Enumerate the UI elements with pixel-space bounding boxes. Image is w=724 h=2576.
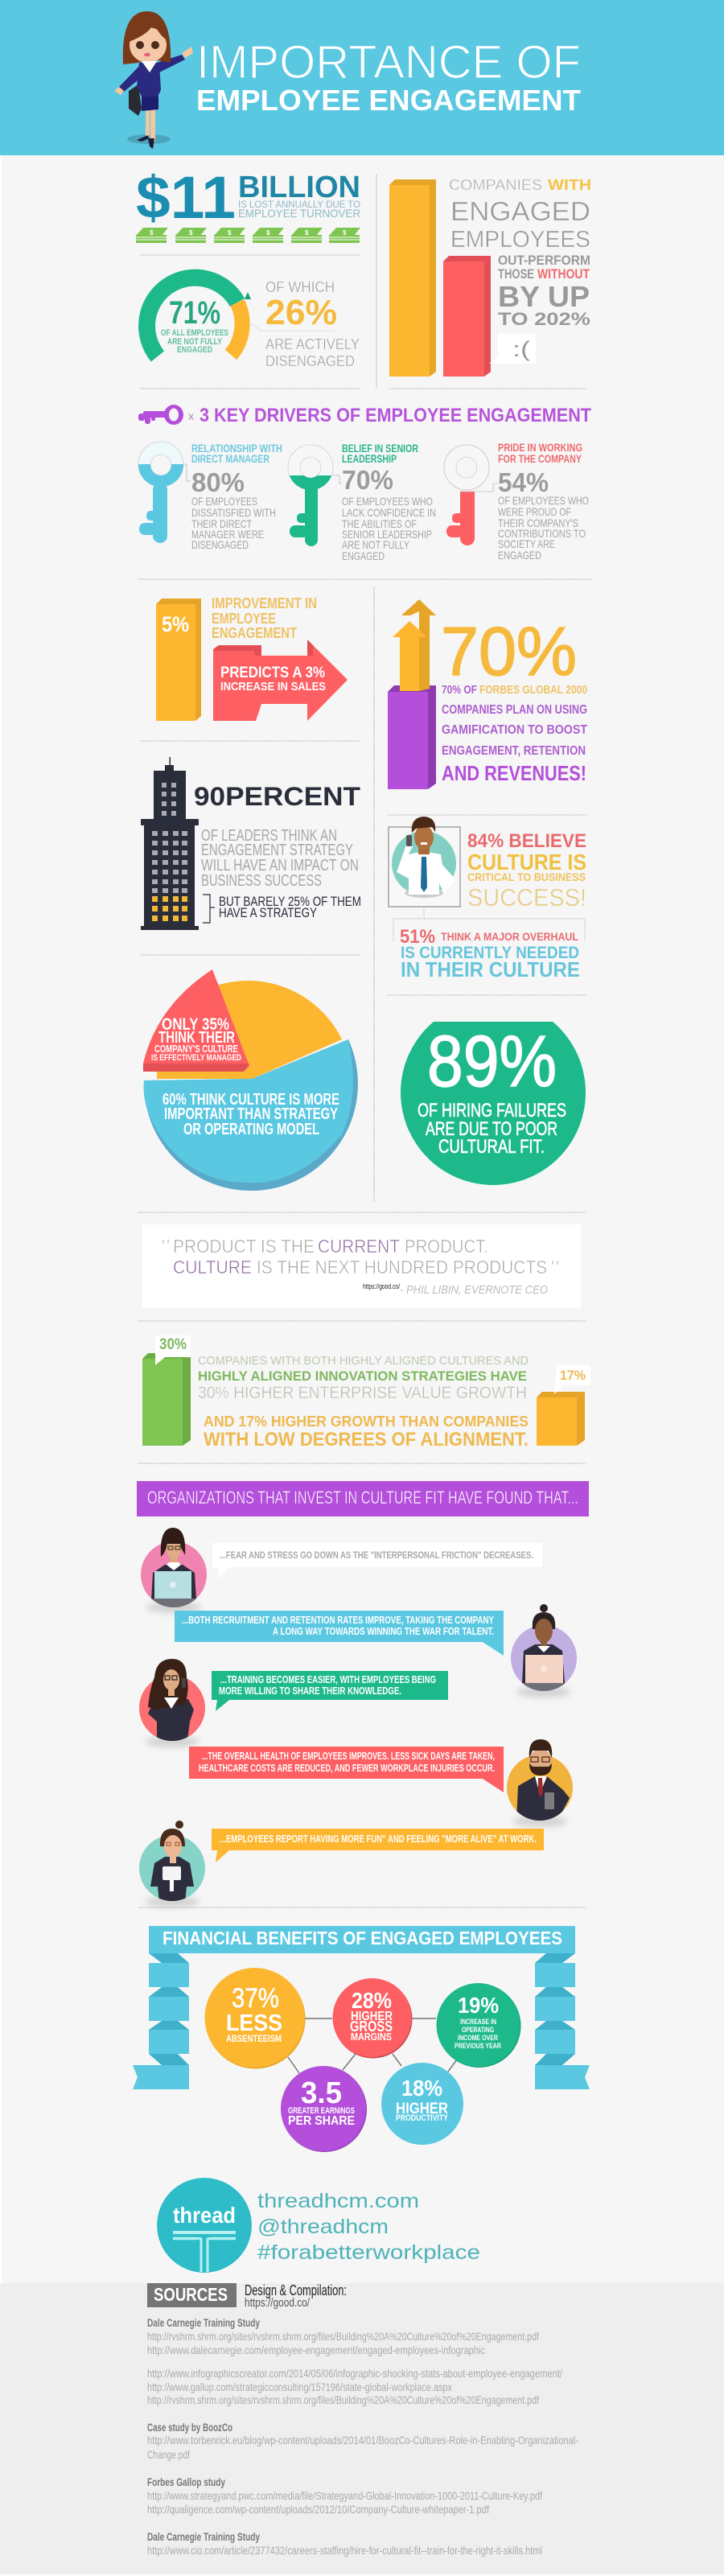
key driver text: 80% — [191, 467, 245, 497]
sources heading: https://good.co/ — [245, 2296, 311, 2310]
key driver text: CONTRIBUTIONS TO — [498, 527, 586, 540]
key driver text — [191, 442, 282, 551]
ribbon banner — [133, 1926, 590, 2089]
speech bubble: more fun — [212, 1829, 544, 1862]
key driver text: WERE PROUD OF — [498, 505, 571, 518]
quote text — [161, 1236, 560, 1278]
leaders text: 90PERCENT — [194, 782, 360, 811]
sad face callout — [489, 334, 536, 364]
icon: money stacks: $ — [189, 229, 193, 237]
arrow: growth arrows on purple bar — [388, 599, 436, 789]
overhaul text: THINK A MAJOR OVERHAUL — [441, 930, 578, 943]
key driver text: SOCIETY ARE — [498, 537, 555, 550]
icon: man on phone — [389, 817, 460, 907]
big number — [136, 164, 360, 231]
speech bubble: more fun: ...EMPLOYEES REPORT HAVING MORE FUN" AND FEELING "MORE ALIVE" AT WORK. — [220, 1833, 537, 1845]
forbes text: 70% — [441, 614, 577, 690]
circle: 18 percent: PRODUCTIVITY — [396, 2113, 449, 2123]
panel: 5 percent predicts sales — [156, 595, 348, 721]
big number: IS LOST ANNUALLY DUE TO — [238, 199, 360, 210]
icon: money stacks — [136, 228, 360, 243]
aligned text: WITH LOW DEGREES OF ALIGNMENT. — [204, 1429, 529, 1451]
key driver text: THEIR DIRECT — [191, 517, 252, 530]
person: woman with tablet, teal — [139, 1821, 205, 1907]
panel: 89 percent hiring failures: 89% — [427, 1022, 557, 1102]
bar text: EMPLOYEES — [450, 227, 590, 253]
pie slice: red 35 percent: ONLY 35% — [162, 1015, 229, 1034]
icon: money stacks: $ — [150, 229, 154, 237]
circle: 18 percent: 18% — [401, 2076, 442, 2101]
text: of which 26 percent: ARE ACTIVELY — [265, 336, 360, 352]
circle: 18 percent — [381, 2063, 463, 2145]
circle: 28 percent — [333, 1978, 412, 2058]
improvement text — [212, 595, 317, 641]
key driver text: ENGAGED — [342, 549, 385, 562]
banner: organizations: ORGANIZATIONS THAT INVEST IN CULTURE FIT HAVE FOUND THAT... — [147, 1488, 578, 1508]
key driver text: THEIR COMPANY'S — [498, 516, 578, 529]
banner: organizations — [137, 1481, 589, 1516]
source list: http://www.dalecarnegie.com/employee-engagement/engaged-employees-infographic — [147, 2344, 485, 2356]
pie chart: culture — [143, 969, 358, 1191]
speech bubble: fear and stress — [212, 1543, 542, 1579]
speech bubble: health — [189, 1747, 504, 1792]
overhaul text: IN THEIR CULTURE — [401, 957, 580, 981]
contact links: #forabetterworkplace — [257, 2241, 480, 2264]
panel: 89 percent hiring failures: ARE DUE TO POOR — [426, 1118, 557, 1140]
person: woman on phone, red — [139, 1659, 205, 1747]
leaders text: ENGAGEMENT STRATEGY — [201, 842, 353, 859]
panel: aligned cultures — [142, 1335, 590, 1451]
pie slice: blue 60 percent — [144, 1039, 358, 1191]
belief text: SUCCESS! — [467, 883, 586, 911]
improvement text: IMPROVEMENT IN — [212, 595, 317, 611]
panel: 89 percent hiring failures — [401, 1022, 586, 1185]
bar text: THOSE — [498, 266, 534, 282]
logo: thread — [157, 2178, 252, 2273]
speech bubble: recruitment: ...BOTH RECRUITMENT AND RETENTION RATES IMPROVE, TAKING THE COMPANY — [182, 1615, 495, 1626]
quote text: " — [550, 1257, 560, 1278]
speech bubble: health: ...THE OVERALL HEALTH OF EMPLOYEES IMPROVES. LESS SICK DAYS ARE TAKEN, — [202, 1751, 495, 1762]
title — [196, 36, 581, 117]
key driver text: THE ABILITIES OF — [342, 517, 417, 530]
aligned text: AND 17% HIGHER GROWTH THAN COMPANIES — [204, 1414, 529, 1430]
icon: money stacks: $ — [343, 229, 347, 237]
key driver text: FOR THE COMPANY — [498, 452, 582, 465]
icon: money stacks: $ — [305, 229, 309, 237]
key driver text: DISENGAGED — [191, 538, 249, 551]
forbes text: 70% OF — [442, 683, 477, 697]
big number: $11 — [136, 164, 236, 231]
source list: http://www.torbenrick.eu/blog/wp-content/uploads/2014/01/BoozCo-Cultures-Role-in-Enabling-Organizational- — [147, 2434, 578, 2446]
bar text: BY UP — [498, 280, 590, 313]
bar text: WITHOUT — [537, 266, 590, 282]
key driver text: OF EMPLOYEES — [191, 495, 257, 508]
pie slice: red 35 percent: IS EFFECTIVELY MANAGED — [151, 1053, 241, 1063]
quote text: IS THE NEXT HUNDRED PRODUCTS — [257, 1257, 547, 1278]
key driver text: 54% — [498, 467, 549, 497]
bar text: TO 202% — [498, 309, 590, 329]
panel: sources — [0, 2282, 724, 2576]
leaders text: BUSINESS SUCCESS — [201, 872, 322, 890]
pie slice: blue 60 percent: 60% THINK CULTURE IS MORE — [162, 1091, 339, 1109]
sad face callout: :( — [512, 337, 530, 361]
key driver text: BELIEF IN SENIOR — [342, 442, 418, 455]
panel: 11 billion turnover — [136, 164, 360, 243]
key driver text: OF EMPLOYEES WHO — [498, 494, 589, 507]
source list: Forbes Gallop study — [147, 2475, 225, 2488]
forbes text: ENGAGEMENT, RETENTION — [442, 744, 586, 758]
belief text: 84% BELIEVE — [467, 830, 586, 852]
person: bearded man with phone — [507, 1739, 573, 1827]
text: of which 26 percent: DISENGAGED — [265, 353, 355, 369]
circle: 37 percent: 37% — [232, 1983, 279, 2014]
panel: 70 percent forbes — [388, 599, 587, 789]
speech bubble: training: ...TRAINING BECOMES EASIER, WITH EMPLOYEES BEING — [220, 1673, 436, 1685]
pie slice: blue 60 percent: OR OPERATING MODEL — [183, 1121, 319, 1138]
panel: culture belief — [389, 817, 586, 981]
arrow: red right: PREDICTS A 3% — [220, 665, 325, 681]
circle: 19 percent: OPERATING — [462, 2026, 494, 2034]
icon: businesswoman character — [114, 11, 193, 149]
key driver text — [342, 442, 436, 562]
pie slice: red 35 percent: THINK THEIR — [158, 1029, 235, 1047]
circle: 18 percent: HIGHER — [396, 2101, 448, 2117]
source list: Case study by BoozCo — [147, 2421, 232, 2434]
key driver text: 70% — [342, 465, 393, 495]
speech bubble: recruitment: A LONG WAY TOWARDS WINNING THE WAR FOR TALENT. — [273, 1626, 494, 1637]
panel: key driver leadership — [288, 442, 436, 562]
source list: Dale Carnegie Training Study — [147, 2316, 260, 2329]
key driver text: OF EMPLOYEES WHO — [342, 495, 433, 508]
belief text: CRITICAL TO BUSINESS — [467, 870, 586, 883]
key driver text: DIRECT MANAGER — [191, 452, 269, 465]
quote text: PRODUCT. — [405, 1236, 488, 1257]
quote text: PRODUCT IS THE — [173, 1236, 315, 1257]
key driver text: LEADERSHIP — [342, 452, 397, 465]
forbes text: AND REVENUES! — [442, 761, 586, 785]
key driver text: RELATIONSHIP WITH — [191, 442, 282, 455]
panel: key driver manager — [138, 442, 282, 551]
bar chart: companies out-perform — [389, 177, 591, 377]
key driver text: LACK CONFIDENCE IN — [342, 506, 436, 519]
circle: 19 percent: INCREASE IN — [460, 2018, 496, 2026]
leaders text: HAVE A STRATEGY — [219, 905, 317, 920]
ribbon banner: FINANCIAL BENEFITS OF ENGAGED EMPLOYEES — [162, 1928, 562, 1948]
circle: 3.5 earnings — [281, 2066, 367, 2152]
key driver text — [498, 441, 589, 562]
panel: quote: https://good.co/ — [363, 1282, 400, 1290]
circle: 37 percent — [204, 1968, 306, 2069]
yellow bar: 5% — [162, 612, 189, 636]
source list: http://www.strategyand.pwc.com/media/file/Strategyand-Global-Innovation-1000-2011-Culture-Key.pdf — [147, 2489, 542, 2502]
overhaul text — [393, 907, 585, 981]
donut chart: 71 percent: ARE NOT FULLY — [167, 337, 223, 347]
pie slice: red 35 percent: COMPANY'S CULTURE — [154, 1043, 238, 1055]
aligned text: HIGHLY ALIGNED INNOVATION STRATEGIES HAVE — [198, 1368, 527, 1384]
circle: 3.5 earnings: PER SHARE — [288, 2114, 355, 2128]
source list: Change.pdf — [147, 2448, 190, 2461]
person: woman with laptop, pink — [141, 1528, 207, 1613]
text: of which 26 percent: OF WHICH — [265, 279, 335, 295]
heading: key drivers: 3 KEY DRIVERS OF EMPLOYEE ENGAGEMENT — [200, 405, 591, 426]
source list — [147, 2316, 578, 2557]
panel: financial benefits — [133, 1926, 590, 2152]
key driver text: SENIOR LEADERSHIP — [342, 528, 432, 541]
source list: http://rvshrm.shrm.org/sites/rvshrm.shrm.org/files/Building%20A%20Culture%20of%20Engagement.pdf — [147, 2330, 539, 2343]
leaders text: OF LEADERS THINK AN — [201, 827, 337, 845]
quote text: " — [161, 1236, 171, 1257]
title: IMPORTANCE OF — [196, 36, 581, 88]
speech bubble: training — [212, 1671, 448, 1711]
panel: 90 percent leaders — [141, 757, 361, 930]
circle: 19 percent: 19% — [458, 1993, 499, 2018]
source list: Dale Carnegie Training Study — [147, 2530, 260, 2543]
bar text: ENGAGED — [450, 196, 590, 226]
belief text: CULTURE IS — [467, 850, 586, 874]
circle: 28 percent: MARGINS — [351, 2031, 392, 2043]
aligned text — [198, 1354, 529, 1451]
circle: 19 percent — [436, 1983, 521, 2068]
yellow bar — [156, 599, 201, 721]
icon: red key — [444, 445, 498, 545]
contact links: threadhcm.com — [257, 2190, 419, 2212]
contact links: @threadhcm — [257, 2216, 389, 2238]
pie slice: blue 60 percent: IMPORTANT THAN STRATEGY — [164, 1105, 338, 1123]
icon: office building — [141, 757, 199, 930]
key driver text: MANAGER WERE — [191, 528, 264, 541]
bar: green 30 percent: 30% — [159, 1336, 187, 1353]
quote text: CURRENT — [318, 1236, 400, 1257]
circle: 3.5 earnings: 3.5 — [301, 2076, 342, 2110]
icon: money stacks: $ — [266, 229, 270, 237]
panel: 89 percent hiring failures: OF HIRING FAILURES — [418, 1100, 566, 1121]
donut chart: 71 percent: OF ALL EMPLOYEES — [161, 328, 228, 338]
pie slice: red 35 percent — [143, 969, 249, 1072]
improvement text: ENGAGEMENT — [212, 625, 297, 641]
icon: money stacks: $ — [228, 229, 232, 237]
contact links — [257, 2190, 480, 2264]
belief text — [467, 830, 586, 911]
speech bubble: health: HEALTHCARE COSTS ARE REDUCED, AND FEWER WORKPLACE INJURIES OCCUR. — [199, 1763, 495, 1774]
circle: 28 percent: GROSS — [350, 2018, 393, 2035]
circle: 19 percent: INCOME OVER — [458, 2034, 498, 2042]
bar text: OUT-PERFORM — [498, 253, 590, 268]
forbes text: FORBES GLOBAL 2000 — [479, 683, 587, 697]
source list: http://www.cio.com/article/2377432/careers-staffing/hire-for-cultural-fit--train-for-the-right-it-skills.html — [147, 2544, 542, 2557]
key driver text: ARE NOT FULLY — [342, 538, 410, 551]
logo: thread: thread — [173, 2203, 236, 2228]
bar text: COMPANIES — [449, 177, 542, 193]
key driver text: PRIDE IN WORKING — [498, 441, 582, 454]
panel: key driver pride — [444, 441, 589, 562]
big number: EMPLOYEE TURNOVER — [238, 207, 360, 220]
panel: quote — [142, 1224, 581, 1308]
bar: green 30 percent — [142, 1335, 191, 1446]
forbes text: GAMIFICATION TO BOOST — [442, 723, 587, 737]
icon: blue key — [138, 442, 191, 543]
quote text: CULTURE — [173, 1257, 252, 1278]
title: EMPLOYEE ENGAGEMENT — [196, 84, 581, 117]
heading: key drivers: x — [188, 409, 194, 422]
donut chart: 71 percent: 71% — [169, 295, 220, 331]
leaders text — [194, 782, 361, 923]
sources heading — [147, 2282, 347, 2310]
speech bubble: training: MORE WILLING TO SHARE THEIR KNOWLEDGE. — [219, 1685, 401, 1697]
panel: quote: - PHIL LIBIN, EVERNOTE CEO — [400, 1283, 548, 1297]
icon: green key — [288, 445, 342, 546]
aligned text: COMPANIES WITH BOTH HIGHLY ALIGNED CULTURES AND — [198, 1354, 529, 1368]
donut chart: 71 percent — [147, 278, 251, 356]
text: of which 26 percent — [251, 279, 360, 369]
arrow: red right — [213, 640, 348, 721]
panel: 89 percent hiring failures: CULTURAL FIT. — [438, 1136, 545, 1158]
bar text: WITH — [548, 177, 591, 193]
overhaul text: 51% — [400, 926, 435, 948]
arrow: red right: INCREASE IN SALES — [220, 680, 326, 693]
circle: 37 percent: ABSENTEEISM — [226, 2033, 282, 2044]
source list: http://www.infographicscreator.com/2014/05/06/infographic-shocking-stats-about-employee-engagement/ — [147, 2367, 562, 2380]
header band — [0, 0, 724, 155]
key driver text: ENGAGED — [498, 549, 541, 562]
source list: http://rvshrm.shrm.org/sites/rvshrm.shrm.org/files/Building%20A%20Culture%20of%20Engagement.pdf — [147, 2393, 539, 2406]
big number: BILLION — [238, 171, 360, 204]
icon: purple key — [138, 405, 183, 425]
donut chart: 71 percent: ENGAGED — [177, 345, 212, 355]
improvement text: EMPLOYEE — [212, 611, 276, 627]
sources heading: Design & Compilation: — [245, 2282, 347, 2298]
bar text — [449, 177, 591, 329]
leaders text: BUT BARELY 25% OF THEM — [219, 894, 361, 909]
bar: yellow 17 percent: 17% — [560, 1368, 586, 1383]
source list: http://qualigence.com/wp-content/uploads/2012/10/Company-Culture-whitepaper-1.pdf — [147, 2503, 489, 2516]
forbes text: COMPANIES PLAN ON USING — [442, 703, 587, 717]
key driver text: DISSATISFIED WITH — [191, 506, 276, 519]
overhaul text: IS CURRENTLY NEEDED — [401, 944, 579, 962]
circle: 19 percent: PREVIOUS YEAR — [455, 2042, 501, 2050]
circle: 28 percent: HIGHER — [351, 2010, 393, 2023]
speech bubble: fear and stress: ...FEAR AND STRESS GO DOWN AS THE "INTERPERSONAL FRICTION" DECREASES. — [220, 1549, 533, 1561]
leaders text: WILL HAVE AN IMPACT ON — [201, 857, 359, 874]
forbes text — [441, 614, 587, 785]
circle: 3.5 earnings: GREATER EARNINGS — [288, 2106, 355, 2116]
speech bubble: recruitment — [175, 1611, 504, 1656]
circle: 28 percent: 28% — [352, 1988, 392, 2013]
text: of which 26 percent: 26% — [265, 293, 337, 332]
person: woman with laptop, purple — [511, 1604, 577, 1697]
aligned text: 30% HIGHER ENTERPRISE VALUE GROWTH — [198, 1384, 527, 1402]
bar: yellow 17 percent — [537, 1365, 590, 1446]
circle: 37 percent: LESS — [226, 2010, 282, 2036]
source list: http://www.gallup.com/strategicconsulting/157196/state-global-workplace.aspx — [147, 2381, 452, 2393]
sources heading: SOURCES — [154, 2284, 228, 2305]
